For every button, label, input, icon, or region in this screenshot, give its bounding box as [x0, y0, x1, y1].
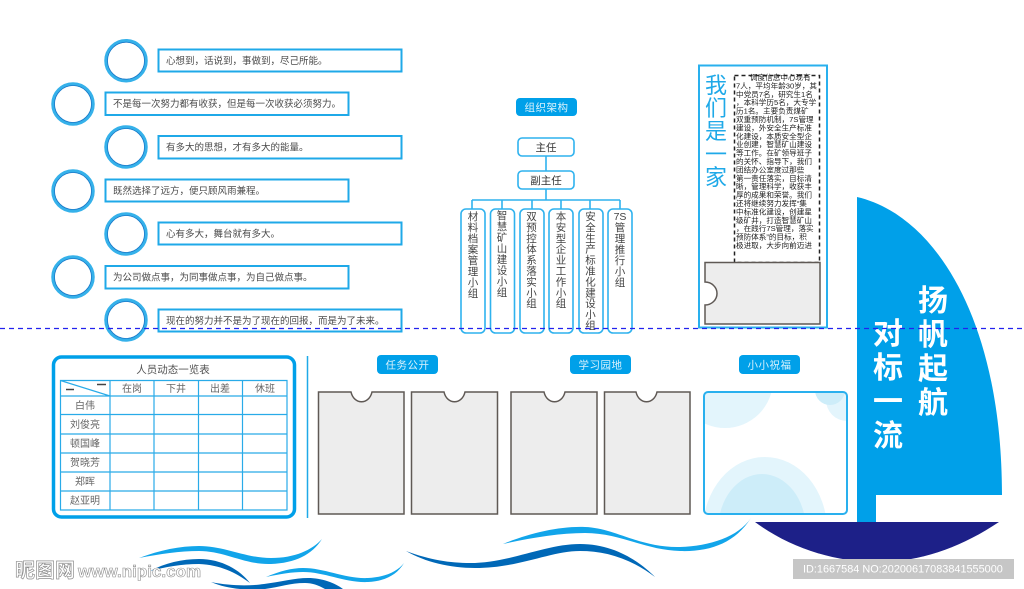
team description: 建设，外安全生产标准 [736, 122, 812, 132]
team description: 中标准化建设，创建星 [736, 206, 812, 216]
motto 6 [53, 257, 348, 297]
group: 智慧矿山建设小组: 小 [497, 276, 508, 288]
group: 本安型企业工作小组: 工 [556, 266, 566, 278]
vertical divider [306, 356, 308, 518]
group: 双预控体系落实小组: 系 [526, 255, 537, 267]
group: 材料档案管理小组 [461, 209, 485, 333]
row names: 白伟 [75, 399, 95, 412]
vertical heading: 一 [705, 142, 727, 167]
group: 双预控体系落实小组: 组 [526, 297, 537, 310]
group: 智慧矿山建设小组: 矿 [497, 231, 507, 244]
group: 本安型企业工作小组 [549, 209, 573, 333]
box: 副主任: 副主任 [530, 174, 562, 187]
group: 材料档案管理小组: 档 [468, 232, 478, 245]
team description: 晰，管理科学，收获丰 [736, 181, 812, 191]
group: 材料档案管理小组: 组 [468, 287, 479, 300]
group: 材料档案管理小组: 小 [468, 277, 479, 289]
table title: 人员动态一览表 [136, 363, 210, 376]
group: 双预控体系落实小组: 小 [526, 287, 537, 299]
column headers: 在岗 [122, 383, 142, 395]
motto 1 [106, 41, 402, 81]
column headers: 下井 [166, 382, 186, 395]
group: 材料档案管理小组: 理 [468, 266, 479, 278]
group: 7S管理推行小组: 7S [614, 211, 626, 223]
motto 6: 为公司做点事，为同事做点事，为自己做点事。 [113, 272, 313, 284]
motto 4 [53, 171, 348, 211]
team description: 的关怀、指导下，我们 [736, 156, 812, 166]
heading: 组织架构: 组织架构 [524, 101, 568, 114]
team description: 等工作。在矿领导班子 [736, 148, 812, 158]
row names: 郑晖 [75, 475, 95, 488]
group: 材料档案管理小组: 管 [468, 254, 478, 267]
group: 本安型企业工作小组: 作 [556, 276, 567, 288]
group: 双预控体系落实小组: 预 [526, 222, 537, 234]
column headers: 休班 [255, 383, 275, 395]
team description: 级矿井，打造智慧矿山 [736, 215, 812, 225]
group: 本安型企业工作小组: 本 [556, 210, 567, 223]
slogan: 扬帆起航: 扬 [918, 285, 948, 318]
column headers [122, 382, 275, 395]
box: 主任 [518, 138, 574, 156]
group: 安全生产标准化建设小组: 组 [585, 319, 596, 332]
group: 本安型企业工作小组: 安 [556, 221, 566, 234]
vertical heading: 我 [705, 73, 727, 98]
team description: 团结办公室度过那些 [736, 164, 805, 174]
team description: ，本科学历5名，大专学 [736, 97, 817, 107]
team description: 厚的成果和荣誉。我们 [736, 190, 812, 200]
group: 智慧矿山建设小组: 设 [497, 265, 508, 277]
group: 智慧矿山建设小组: 智 [497, 209, 507, 222]
group: 安全生产标准化建设小组: 安 [585, 210, 596, 223]
watermark: nipic logo: www.nipic.com [77, 562, 201, 581]
group: 安全生产标准化建设小组: 准 [585, 266, 596, 278]
group: 双预控体系落实小组: 体 [526, 244, 537, 256]
group: 7S管理推行小组: 管 [615, 221, 625, 234]
group: 智慧矿山建设小组: 山 [497, 243, 507, 255]
group: 双预控体系落实小组 [520, 209, 544, 333]
group: 双预控体系落实小组: 双 [526, 211, 537, 223]
group: 安全生产标准化建设小组: 建 [585, 286, 596, 299]
motto 3 [106, 127, 402, 167]
slogan: 对标一流: 标 [873, 352, 903, 385]
label: 学习园地 [570, 355, 631, 374]
slogan: 对标一流: 对 [873, 318, 903, 351]
panel: personnel table [54, 357, 294, 517]
group: 本安型企业工作小组: 企 [556, 243, 567, 256]
vertical heading: 家 [705, 165, 727, 190]
label: 小小祝福: 小小祝福 [748, 358, 792, 372]
team description: 双重预防机制，7S管理 [736, 114, 814, 124]
group: 材料档案管理小组: 材 [468, 210, 479, 223]
motto 4: 既然选择了远方，便只顾风雨兼程。 [113, 185, 265, 197]
motto 3: 有多大的思想，才有多大的能量。 [166, 142, 309, 154]
group: 安全生产标准化建设小组: 生 [585, 232, 596, 245]
panel: 我们是一家 [699, 66, 827, 328]
slogan: 扬帆起航: 航 [918, 387, 948, 420]
label: 学习园地: 学习园地 [578, 358, 622, 372]
slogan: 对标一流: 一 [873, 386, 903, 419]
column headers: 出差 [210, 382, 230, 395]
team description: 7人，平均年龄30岁，其 [736, 80, 817, 90]
organization chart [461, 98, 632, 333]
group: 双预控体系落实小组: 落 [526, 266, 537, 278]
group: 智慧矿山建设小组: 建 [497, 253, 508, 266]
group: 材料档案管理小组: 料 [468, 221, 479, 234]
group: 本安型企业工作小组: 小 [556, 287, 567, 299]
box: 主任: 主任 [536, 141, 557, 154]
group: 智慧矿山建设小组: 组 [497, 286, 508, 299]
box: 副主任 [518, 171, 574, 189]
team description: ，在践行7S管理，落实 [736, 223, 814, 233]
group: 安全生产标准化建设小组 [579, 209, 603, 333]
group: 7S管理推行小组: 理 [615, 233, 626, 245]
group: 本安型企业工作小组: 型 [556, 232, 566, 245]
slogan: 扬帆起航: 帆 [918, 319, 948, 352]
motto 5: 心有多大，舞台就有多大。 [166, 228, 280, 240]
motto 1: 心想到，话说到，事做到，尽己所能。 [166, 55, 328, 67]
watermark: nipic logo: 昵图网 [15, 560, 75, 582]
row names [70, 399, 100, 507]
motto 2: 不是每一次努力都有收获，但是每一次收获必须努力。 [113, 98, 341, 110]
connector lines [472, 156, 620, 209]
group: 本安型企业工作小组: 业 [556, 255, 566, 267]
heading: 组织架构 [516, 98, 577, 116]
vertical heading: 是 [705, 119, 727, 144]
document pocket 4 [604, 392, 690, 514]
group: 7S管理推行小组: 行 [615, 254, 626, 267]
row names: 赵亚明 [70, 494, 100, 507]
slogan: 对标一流: 流 [873, 420, 903, 453]
row names: 刘俊亮 [70, 418, 100, 431]
group: 材料档案管理小组: 案 [468, 243, 479, 256]
team description: 第一责任落实，目标清 [736, 173, 812, 183]
team description: 历1名。主要负责煤矿 [736, 106, 809, 116]
slogan: 扬帆起航: 起 [918, 353, 948, 386]
vertical heading: 们 [705, 96, 727, 121]
motto 7: 现在的努力并不是为了现在的回报，而是为了未来。 [166, 315, 385, 327]
table grid [60, 380, 287, 510]
group: 安全生产标准化建设小组: 产 [585, 243, 596, 256]
label: 小小祝福 [739, 355, 800, 374]
panel: wishes board [703, 391, 848, 515]
photo pocket [705, 262, 820, 324]
group: 7S管理推行小组: 推 [615, 243, 625, 256]
motto 2 [53, 84, 348, 124]
team description: 化建设，本质安全型企 [736, 131, 812, 141]
team description: 中党员7名，研究生1名 [736, 89, 813, 99]
watermark: nipic logo [15, 560, 201, 582]
team description: 极进取，大步向前迈进 [736, 240, 812, 250]
team description: 调度信息中心现有 [750, 72, 811, 82]
watermark: image id [793, 559, 1014, 579]
watermark: image id: ID:1667584 NO:20200617083841555000 [803, 564, 1003, 576]
group: 本安型企业工作小组: 组 [556, 297, 567, 310]
document pocket 1 [318, 392, 404, 514]
sail and mast [857, 197, 1002, 522]
group: 双预控体系落实小组: 控 [526, 232, 537, 245]
document pocket 2 [412, 392, 498, 514]
group: 双预控体系落实小组: 实 [526, 275, 537, 288]
team description: 预防体系”的目标，积 [736, 232, 807, 242]
row names: 贺晓芳 [70, 456, 100, 469]
header corner marks [66, 384, 106, 390]
label: 任务公开: 任务公开 [386, 358, 430, 372]
group: 智慧矿山建设小组: 慧 [497, 220, 507, 233]
group: 安全生产标准化建设小组: 全 [585, 221, 596, 234]
hull [755, 522, 999, 562]
group: 7S管理推行小组 [608, 209, 632, 333]
sailboat [755, 197, 1002, 562]
motto 5 [106, 214, 402, 254]
group: 安全生产标准化建设小组: 标 [585, 255, 596, 267]
group: 安全生产标准化建设小组: 小 [585, 309, 596, 321]
group: 7S管理推行小组: 小 [615, 266, 626, 278]
motto 7 [106, 300, 402, 340]
waves [139, 518, 751, 589]
guide line: dashed [0, 328, 1024, 330]
label: 任务公开 [377, 355, 438, 374]
row names: 顿国峰 [70, 437, 100, 450]
group: 安全生产标准化建设小组: 设 [585, 298, 596, 310]
motto list [53, 41, 402, 340]
team description: 还将继续努力发挥“集 [736, 198, 807, 208]
group: 安全生产标准化建设小组: 化 [585, 275, 596, 288]
dashed text frame [734, 76, 820, 262]
group: 智慧矿山建设小组 [490, 209, 514, 333]
document pocket 3 [511, 392, 597, 514]
group: 7S管理推行小组: 组 [615, 276, 626, 289]
team description: 业创建，智慧矿山建设 [736, 139, 812, 149]
